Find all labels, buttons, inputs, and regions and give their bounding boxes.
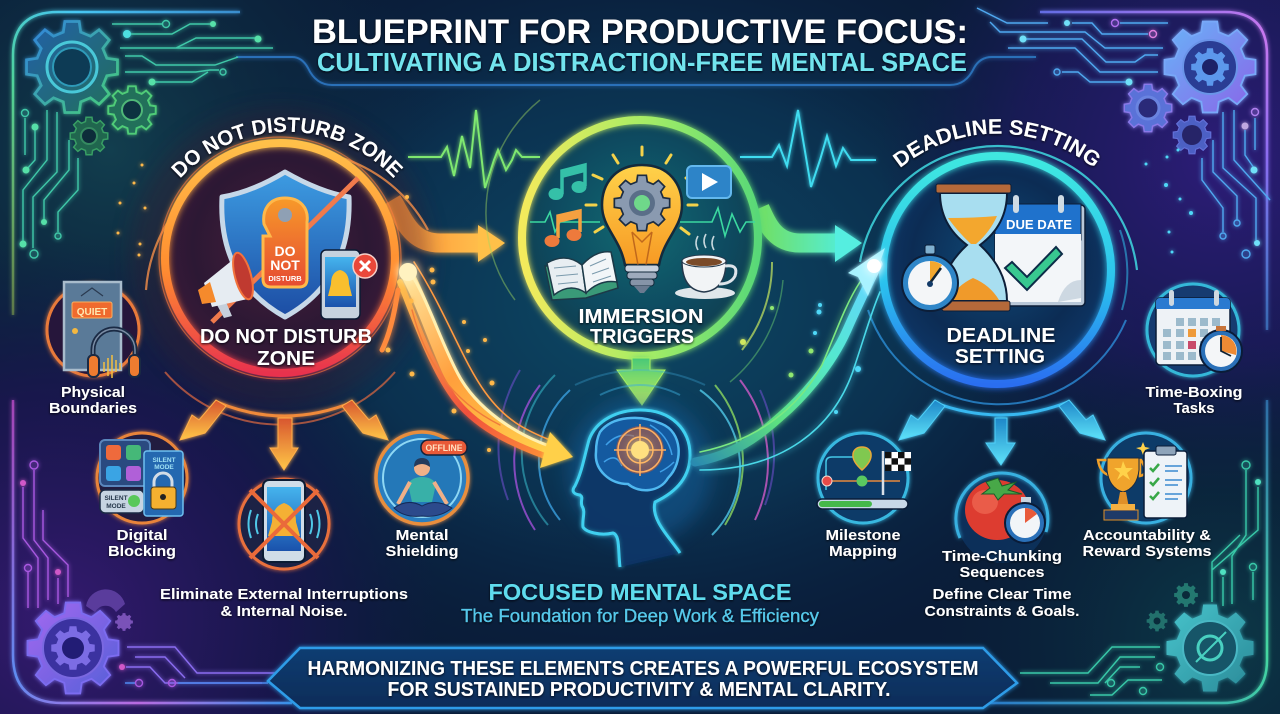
label: time-chunking sequences <box>942 548 1062 581</box>
connector arrow: immersion to deadline <box>760 208 862 262</box>
bottom banner <box>268 648 1017 708</box>
panel: immersion triggers ring <box>486 100 783 382</box>
text: eliminate interruptions <box>160 586 408 620</box>
label: time-chunking sequences: Sequences <box>960 564 1044 581</box>
gear: top left cluster <box>27 22 156 155</box>
label: milestone mapping <box>826 527 900 560</box>
curved label: do not disturb zone: DO NOT DISTURB ZONE <box>170 117 404 180</box>
label: digital blocking <box>108 527 176 560</box>
connector arrow: do not disturb to immersion <box>392 200 505 262</box>
icon: shield with door hanger, megaphone and phone: DO <box>274 243 296 259</box>
label: milestone mapping: Milestone <box>826 527 900 544</box>
label: milestone mapping: Mapping <box>829 543 897 560</box>
bottom banner: FOR SUSTAINED PRODUCTIVITY & MENTAL CLARITY. <box>388 679 890 701</box>
text: eliminate interruptions: & Internal Noise. <box>220 603 348 620</box>
label: deadline setting <box>946 325 1056 368</box>
label: do not disturb zone: ZONE <box>257 348 315 370</box>
label: mental shielding <box>386 527 458 560</box>
gear: bottom right cluster <box>1147 583 1253 691</box>
arrow head: focus flow <box>540 432 573 468</box>
icon: physical boundaries <box>47 282 140 378</box>
label: immersion triggers <box>578 306 704 348</box>
text: eliminate interruptions: Eliminate External Interruptions <box>160 586 408 603</box>
arrow head: deadline flow <box>848 248 885 296</box>
icon: digital blocking: MODE <box>106 503 126 510</box>
label: mental shielding: Shielding <box>386 543 458 560</box>
connector flow: focus to deadline <box>695 248 885 470</box>
label: time-boxing tasks: Time-Boxing <box>1146 384 1242 401</box>
label: physical boundaries <box>49 384 137 417</box>
label: physical boundaries: Physical <box>61 384 125 401</box>
text: define clear time constraints: Define Clear Time <box>932 586 1072 603</box>
label: deadline setting: DEADLINE <box>946 325 1056 347</box>
label: accountability and reward systems: Accountability & <box>1083 527 1211 544</box>
circuit traces: bottom left <box>20 461 278 686</box>
icon: digital blocking: MODE <box>154 464 174 471</box>
label: immersion triggers: TRIGGERS <box>590 326 694 348</box>
panel: deadline setting ring <box>859 118 1138 406</box>
icon: hourglass, stopwatch and due date calendar: DUE DATE <box>1006 217 1072 232</box>
icon: mental shielding: OFFLINE <box>426 443 462 454</box>
gear: bottom left cluster <box>28 589 133 693</box>
icon: physical boundaries: QUIET <box>77 307 107 318</box>
branch arrows: deadline <box>899 400 1105 465</box>
bottom banner: HARMONIZING THESE ELEMENTS CREATES A POWERFUL ECOSYSTEM <box>308 658 978 680</box>
circuit traces: top left <box>20 20 273 258</box>
label: deadline setting: SETTING <box>955 346 1045 368</box>
icon: shield with door hanger, megaphone and phone: NOT <box>270 257 300 273</box>
label: accountability and reward systems: Reward Systems <box>1082 543 1212 560</box>
icon: mental shielding <box>376 432 468 524</box>
icon: trophy and checklist <box>1098 433 1191 523</box>
label: do not disturb zone <box>200 326 372 370</box>
icon: light bulb with gear, notes, book, video and coffee <box>530 147 755 300</box>
text: define clear time constraints <box>924 586 1080 620</box>
circuit traces: bottom right <box>1020 461 1261 695</box>
icon: digital blocking: SILENT <box>104 495 128 502</box>
label: mental shielding: Mental <box>396 527 448 544</box>
connector flow: do not disturb to focus <box>382 262 573 468</box>
icon: time-boxing calendar <box>1147 284 1242 376</box>
circuit traces: top right <box>977 8 1270 258</box>
text: define clear time constraints: Constraints & Goals. <box>924 603 1080 620</box>
text: focused mental space: The Foundation for Deep Work & Efficiency <box>461 606 819 626</box>
icon: silenced phone <box>239 479 329 569</box>
label: time-boxing tasks <box>1146 384 1242 417</box>
label: time-boxing tasks: Tasks <box>1174 400 1214 417</box>
heartbeat lines <box>408 110 876 188</box>
panel: do not disturb ring <box>132 109 441 426</box>
icon: tomato timer <box>956 473 1048 563</box>
label: physical boundaries: Boundaries <box>49 400 137 417</box>
icon: shield with door hanger, megaphone and phone <box>198 172 377 322</box>
sound wave arcs around brain <box>498 370 774 535</box>
gear: top right cluster <box>1124 22 1255 154</box>
label: digital blocking: Digital <box>116 527 168 544</box>
label: do not disturb zone: DO NOT DISTURB <box>200 326 372 348</box>
icon: digital blocking <box>97 433 187 523</box>
text: focused mental space: FOCUSED MENTAL SPACE <box>488 579 792 605</box>
connector arrow: immersion to focus <box>617 358 665 405</box>
icon: digital blocking: SILENT <box>152 457 176 464</box>
title: BLUEPRINT FOR PRODUCTIVE FOCUS: <box>312 13 968 51</box>
icon: milestone mapping <box>817 433 911 523</box>
label: immersion triggers: IMMERSION <box>578 306 704 328</box>
label: time-chunking sequences: Time-Chunking <box>942 548 1062 565</box>
icon: brain with focus target in head silhouette <box>568 398 712 567</box>
icon: shield with door hanger, megaphone and phone: DISTURB <box>268 274 302 283</box>
text: focused mental space <box>461 579 819 626</box>
particles <box>116 148 1193 452</box>
branch arrows: do not disturb <box>180 400 388 470</box>
title <box>312 13 968 77</box>
label: digital blocking: Blocking <box>108 543 176 560</box>
curved label: deadline setting: DEADLINE SETTING <box>892 118 1101 169</box>
icon: hourglass, stopwatch and due date calendar <box>902 184 1085 311</box>
title: CULTIVATING A DISTRACTION-FREE MENTAL SPACE <box>317 47 967 77</box>
label: accountability and reward systems <box>1082 527 1212 560</box>
